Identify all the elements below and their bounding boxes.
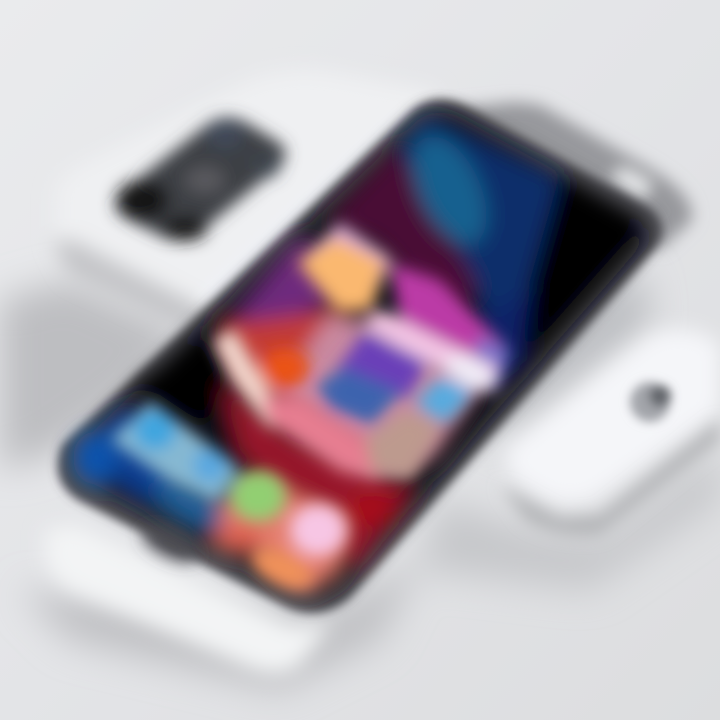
screen base [74,112,645,594]
icon: sky app [415,376,475,424]
icon: green app [230,471,286,521]
icon: cyan app [134,410,176,450]
main phone lower rim shadow [138,521,202,569]
screen wallpaper: black corner [520,175,640,360]
label strip: pink [362,310,498,394]
pink halo above orange app [305,222,392,290]
row: pale blue app strip [110,400,240,504]
main phone top edge, upper right [440,102,692,250]
icon: orange app [297,238,385,312]
screen wallpaper: purple and red [235,240,335,325]
soft shadows [0,270,720,690]
icon: light pink app [290,504,346,556]
screen wallpaper: lower colour fill [215,480,345,590]
screen base: centre colour fill [280,315,470,470]
main phone body [58,99,662,613]
main phone screen [73,112,645,594]
icon: right phone camera lens [630,382,671,422]
icon: purple app [335,330,428,398]
pink wave [262,395,380,482]
orange glow [261,348,309,388]
app icons cluster [110,222,510,596]
back phone: top left [52,70,440,332]
icon: camera module [115,117,286,241]
back phone: bottom left [45,525,330,673]
right phone lower edge [500,420,720,536]
back phone: right [505,329,720,504]
strip: pale pink left [212,328,305,428]
screen wallpaper: dark plum band [330,150,480,310]
screen wallpaper: blue top [400,118,560,360]
screen wallpaper: black band [135,335,225,425]
screen wallpaper: blue bottom left [80,410,200,520]
icon: blue app [316,368,402,425]
screen wallpaper: magenta glow [390,262,505,365]
icon: tan app [365,410,442,480]
icon: blue app small [193,448,227,482]
screen wallpaper: dark red band [222,385,410,565]
icon: orange app bottom [246,540,318,596]
